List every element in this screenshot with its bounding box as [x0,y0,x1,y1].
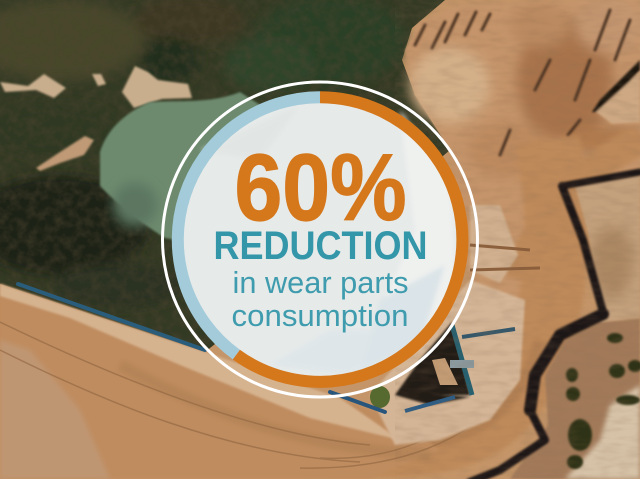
rocky ground and conveyors below the circle [370,205,540,445]
outer white ring [162,82,478,397]
caption line 1: in wear parts [232,265,408,300]
60% figure: 60% [234,135,406,241]
lower left ground [0,284,510,479]
blue pipeline [18,284,385,412]
translucent inner disc [177,96,463,382]
soil streak texture [395,0,640,479]
sand pit, upper right [401,7,640,174]
dirt road [380,133,640,477]
statistic badge [162,82,478,397]
dark slash and terrace, upper right [592,60,640,124]
progress ring: remaining 40% [178,97,320,355]
terrace, right side [575,174,640,322]
dark drainage channel [470,172,640,479]
caption line 2: consumption [232,298,408,333]
REDUCTION heading: REDUCTION [214,224,428,268]
lower right rocky terrain [510,318,640,479]
progress ring: 60% [236,97,462,382]
forest [0,0,448,350]
stat text [214,135,428,333]
sand patches on the forest edge [0,66,192,171]
green pond [98,91,260,240]
forest canopy texture [0,0,448,344]
